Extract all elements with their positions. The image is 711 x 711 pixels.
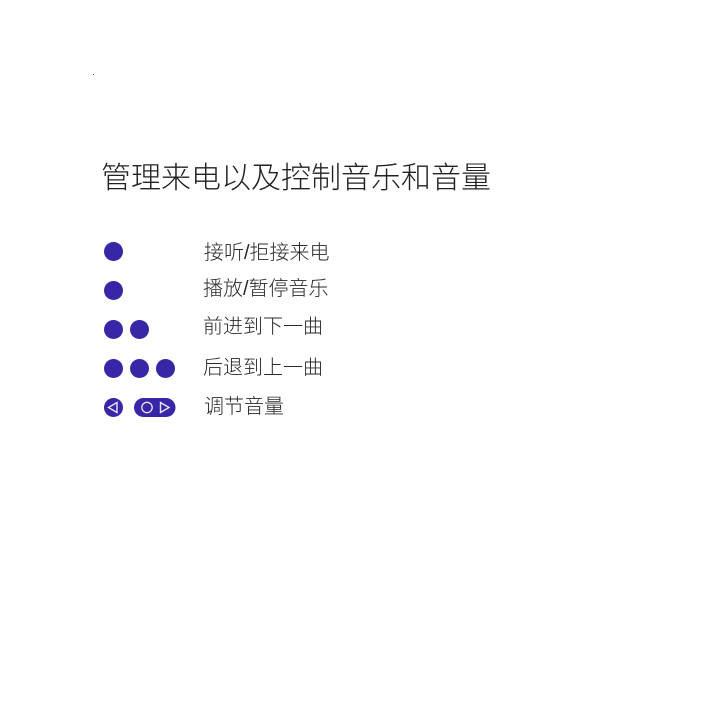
icon: single press for music [104,281,123,300]
small dot mark [93,74,94,75]
label: play or pause music: 播放/暂停音乐 [203,278,329,300]
icon: volume up pill button [134,398,176,417]
label: next track: 前进到下一曲 [203,316,323,338]
label: adjust volume: 调节音量 [204,396,284,418]
icon: volume down button [104,398,123,417]
label: previous track: 后退到上一曲 [203,357,323,379]
icon: triple press [104,359,175,378]
title: 管理来电以及控制音乐和音量 [101,162,491,195]
label: answer or reject call: 接听/拒接来电 [204,242,330,264]
icon: double press [104,320,149,339]
icon: single press [104,242,123,261]
